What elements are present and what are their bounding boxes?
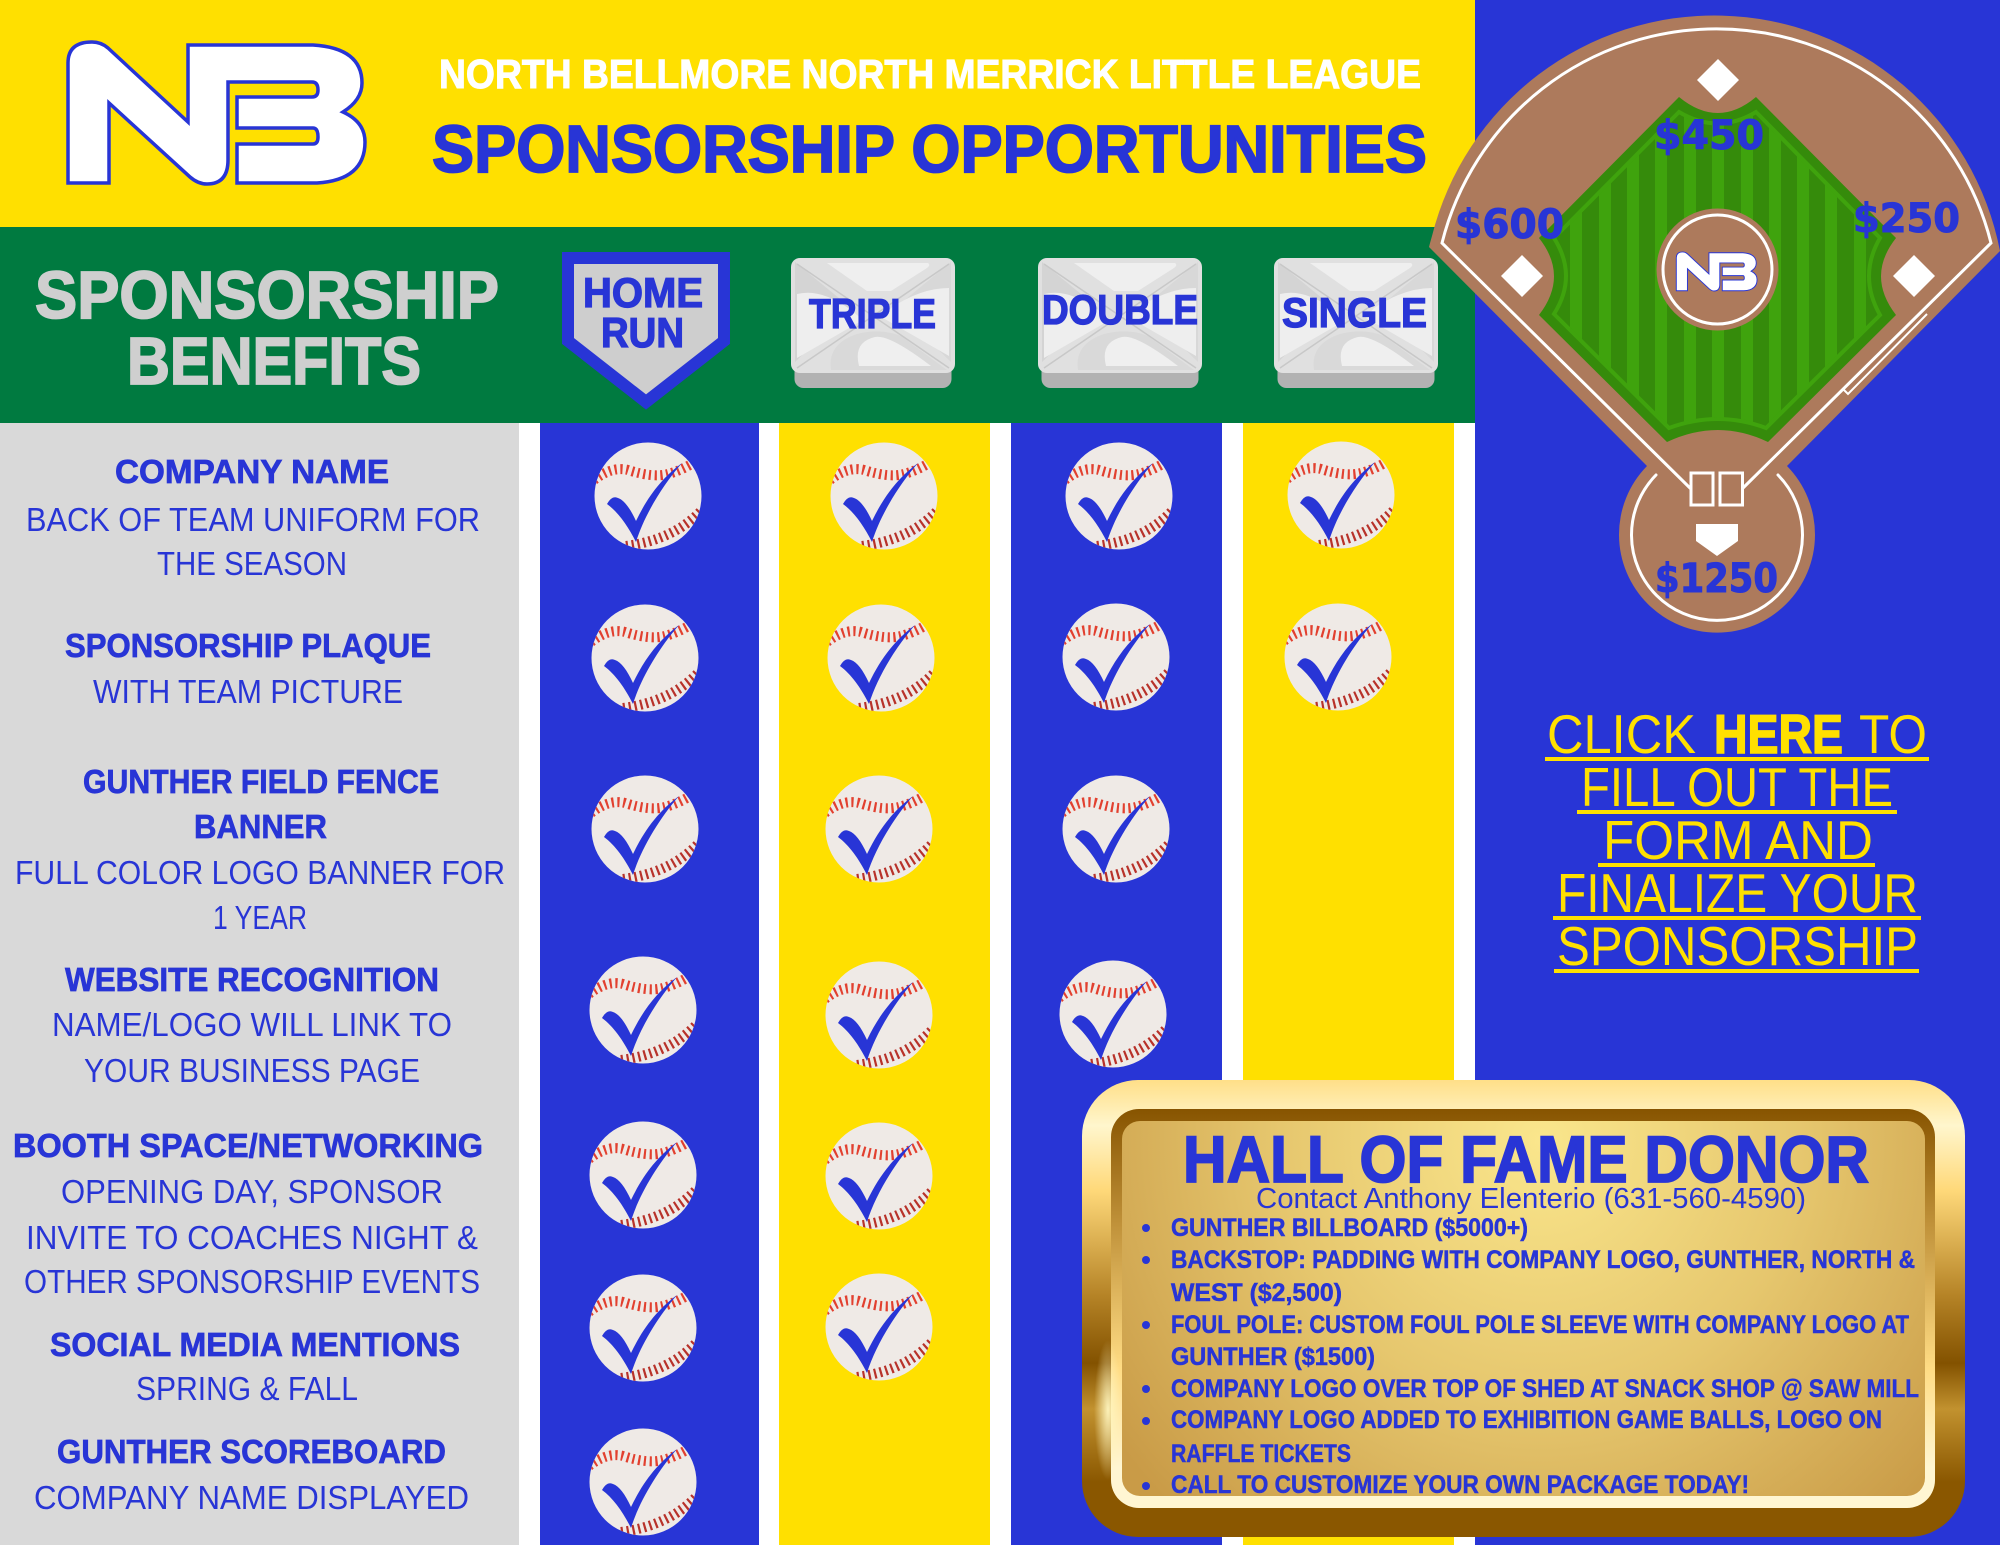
benefit: website recognition: [52, 961, 452, 1089]
donor options list: FOUL POLE: CUSTOM FOUL POLE SLEEVE WITH COMPANY LOGO AT: [1171, 1311, 1909, 1339]
baseball diamond: [1429, 15, 2000, 633]
benefit: social media: SPRING & FALL: [136, 1370, 358, 1407]
tier: triple base: [791, 258, 955, 388]
benefit: website recognition: WEBSITE RECOGNITION: [65, 961, 439, 998]
batter boxes: [1691, 473, 1742, 505]
price: $600: $600: [1455, 202, 1564, 248]
benefit: company name: [26, 453, 480, 582]
donor options list: [1142, 1214, 1919, 1499]
benefit: website recognition: NAME/LOGO WILL LINK TO: [52, 1006, 452, 1043]
heading: sponsorship benefits: [35, 258, 499, 399]
title: [432, 51, 1427, 187]
panel: page background columns: [0, 423, 1475, 1545]
call to action link: FILL OUT THE: [1581, 756, 1893, 818]
donor options list: WEST ($2,500): [1171, 1279, 1342, 1307]
main heading: SPONSORSHIP OPPORTUNITIES: [432, 112, 1427, 187]
tier: home run plate: [568, 258, 724, 402]
panel: green benefits header: [0, 227, 1475, 423]
bases: [1501, 59, 1935, 556]
donor options list: BACKSTOP: PADDING WITH COMPANY LOGO, GUNTHER, NORTH &: [1171, 1246, 1915, 1274]
tier: triple base: TRIPLE: [809, 290, 936, 337]
donor options list: GUNTHER BILLBOARD ($5000+): [1171, 1214, 1528, 1242]
call to action link: SPONSORSHIP: [1557, 915, 1918, 977]
panel: right blue column: [1475, 0, 2000, 1545]
donor options list: RAFFLE TICKETS: [1171, 1440, 1351, 1468]
benefits list: [13, 453, 505, 1516]
donor options list: CALL TO CUSTOMIZE YOUR OWN PACKAGE TODAY!: [1171, 1471, 1749, 1499]
benefit: booth space: [13, 1127, 483, 1300]
column: home run: [540, 423, 759, 1545]
logo: NB: [68, 42, 365, 184]
tier: double base: DOUBLE: [1042, 286, 1198, 333]
benefit: fence banner: [15, 763, 505, 936]
foul lines and outfield arc: [1442, 29, 1991, 489]
tier: single base: [1274, 258, 1438, 388]
benefit: fence banner: BANNER: [194, 808, 327, 845]
checkmarks: triple: [825, 442, 938, 1380]
hall of fame heading: HALL OF FAME DONOR: [1183, 1122, 1869, 1196]
benefit: sponsorship plaque: WITH TEAM PICTURE: [93, 673, 403, 710]
benefit: booth space: OPENING DAY, SPONSOR: [61, 1173, 443, 1210]
home circle line: [1631, 475, 1802, 620]
price: $250: $250: [1853, 196, 1960, 242]
benefit: website recognition: YOUR BUSINESS PAGE: [84, 1052, 420, 1089]
tier: home run plate: RUN: [601, 309, 684, 356]
benefit: gunther scoreboard: GUNTHER SCOREBOARD: [57, 1433, 446, 1470]
price: $450: $450: [1654, 113, 1764, 159]
gold inner frame: [1111, 1109, 1935, 1508]
league name: NORTH BELLMORE NORTH MERRICK LITTLE LEAGUE: [439, 51, 1421, 97]
call to action link: CLICK: [1547, 703, 1696, 765]
pitcher mound with logo: [1656, 208, 1778, 330]
contact line: Contact Anthony Elenterio (631-560-4590): [1256, 1183, 1806, 1215]
call to action link: HERE: [1714, 703, 1843, 765]
benefit: booth space: INVITE TO COACHES NIGHT &: [26, 1219, 478, 1256]
call to action link: TO: [1859, 703, 1927, 765]
checkmarks: double: [1059, 442, 1172, 1068]
checkmarks: single: [1284, 442, 1394, 710]
benefit: fence banner: 1 YEAR: [213, 899, 307, 936]
donor options list: COMPANY LOGO ADDED TO EXHIBITION GAME BALLS, LOGO ON: [1171, 1406, 1882, 1434]
dirt field: [1429, 15, 2000, 633]
donor options list: GUNTHER ($1500): [1171, 1343, 1375, 1371]
call to action link: FORM AND: [1603, 809, 1873, 871]
heading: sponsorship benefits: SPONSORSHIP: [35, 258, 499, 333]
tier: double base: [1038, 258, 1202, 388]
heading: sponsorship benefits: BENEFITS: [127, 324, 421, 399]
price: $1250: $1250: [1655, 556, 1778, 602]
column: double: [1011, 423, 1222, 1545]
benefit: gunther scoreboard: [34, 1433, 469, 1516]
checkmarks: home run: [589, 442, 702, 1536]
benefit: fence banner: GUNTHER FIELD FENCE: [83, 763, 439, 800]
panel: hall of fame donor: [1082, 1080, 1965, 1537]
benefit: booth space: OTHER SPONSORSHIP EVENTS: [24, 1263, 480, 1300]
benefit: sponsorship plaque: SPONSORSHIP PLAQUE: [65, 627, 431, 664]
tier: single base: SINGLE: [1282, 289, 1427, 336]
benefit: company name: THE SEASON: [157, 545, 347, 582]
infield grass: [1539, 90, 1896, 450]
gold outer frame: [1082, 1080, 1965, 1537]
donor options list: COMPANY LOGO OVER TOP OF SHED AT SNACK SHOP @ SAW MILL: [1171, 1375, 1919, 1403]
benefit: fence banner: FULL COLOR LOGO BANNER FOR: [15, 854, 505, 891]
call to action link: FINALIZE YOUR: [1557, 862, 1918, 924]
coach line: [1844, 314, 1927, 394]
call to action link: [1545, 703, 1929, 977]
benefit: company name: COMPANY NAME: [115, 453, 389, 490]
benefit: booth space: BOOTH SPACE/NETWORKING: [13, 1127, 483, 1164]
tier: home run plate: HOME: [583, 269, 703, 316]
benefit: sponsorship plaque: [65, 627, 431, 710]
panel: yellow title header: [0, 0, 1475, 227]
benefit: gunther scoreboard: COMPANY NAME DISPLAYED: [34, 1479, 469, 1516]
benefit: company name: BACK OF TEAM UNIFORM FOR: [26, 501, 480, 538]
panel: benefits list background: [0, 423, 519, 1545]
column: triple: [779, 423, 990, 1545]
benefit: social media: SOCIAL MEDIA MENTIONS: [50, 1326, 460, 1363]
gold plate: [1122, 1121, 1925, 1496]
column: single: [1243, 423, 1454, 1545]
benefit: social media: [50, 1326, 460, 1407]
